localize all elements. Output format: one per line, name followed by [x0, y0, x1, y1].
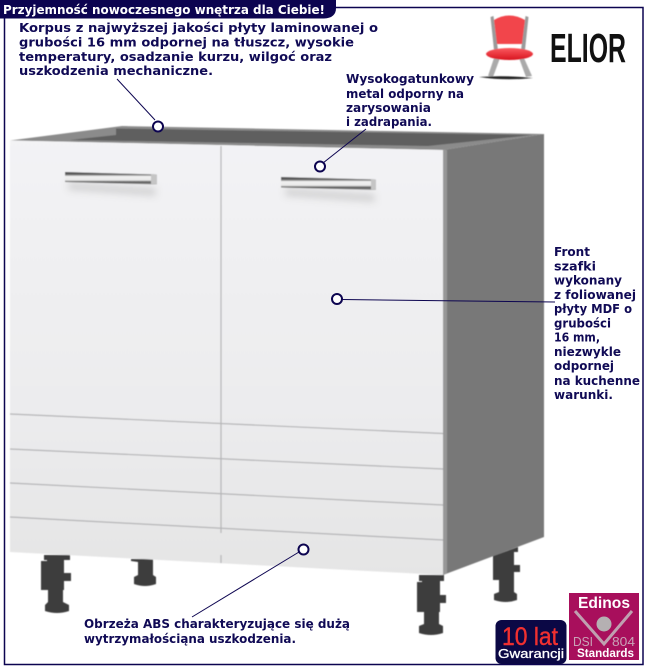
text: korpus: uszkodzenia mechaniczne. — [19, 64, 213, 78]
cabinet inner — [70, 128, 532, 146]
text: korpus — [19, 21, 378, 78]
leg: front left — [41, 555, 71, 613]
badge: 10 lat gwarancji: 10 lat — [502, 623, 558, 651]
icon: chair — [479, 16, 533, 79]
badge V mark — [575, 611, 632, 644]
text: front: na kuchenne — [554, 374, 640, 388]
callout: metal — [315, 129, 366, 172]
text: front: Front — [554, 245, 590, 259]
text: front: szafki — [554, 260, 596, 274]
badge: Edinos standards: 804 — [612, 634, 635, 649]
leg: front right — [417, 575, 446, 635]
handle: right — [281, 177, 376, 202]
badge: Edinos standards — [569, 593, 639, 660]
title bar: Przyjemność nowoczesnego wnętrza dla Ciebie! — [3, 3, 325, 17]
text: korpus: temperatury, osadzanie kurzu, wilgoć oraz — [19, 50, 332, 64]
text: front: wykonany — [554, 274, 622, 288]
callout: korpus — [117, 79, 163, 132]
text: front: odpornej — [554, 359, 614, 373]
text: front: warunki. — [554, 388, 613, 402]
logo: Elior — [479, 16, 626, 79]
text: front: 16 mm, — [554, 330, 600, 344]
text: obrzeża: Obrzeża ABS charakteryzujące się dużą — [84, 617, 350, 631]
badge: Edinos standards: DSI — [573, 634, 593, 649]
door gaps — [10, 146, 443, 563]
cabinet side — [443, 134, 544, 575]
badge: 10 lat gwarancji: Gwarancji — [498, 646, 564, 661]
handle: left — [65, 172, 157, 196]
callout: front — [332, 294, 555, 304]
cabinet illustration — [10, 126, 544, 635]
cabinet top — [10, 126, 544, 150]
text: front: z foliowanej — [554, 288, 636, 302]
leg: back left — [131, 559, 156, 586]
badge: Edinos standards: Standards — [577, 648, 634, 660]
text: front: płyty MDF o — [554, 302, 632, 316]
text: obrzeża: wytrzymałościąna uszkodzenia. — [84, 632, 296, 646]
text: metal: i zadrapania. — [346, 115, 432, 129]
text: metal: metal odporny na — [346, 87, 464, 101]
cabinet front — [10, 140, 443, 575]
text: metal — [346, 72, 474, 129]
cabinet legs — [41, 547, 520, 635]
text: korpus: Korpus z najwyższej jakości płyty laminowanej o — [19, 21, 378, 35]
text: korpus: grubości 16 mm odpornej na tłuszcz, wysokie — [19, 36, 354, 50]
text: metal: Wysokogatunkowy — [346, 72, 474, 86]
callout: obrzeża — [192, 544, 308, 617]
badge: Edinos standards: Edinos — [578, 595, 630, 612]
text: front — [554, 245, 640, 402]
leg: back right — [493, 547, 520, 602]
text: obrzeża — [84, 617, 350, 646]
text: metal: zarysowania — [346, 101, 431, 115]
text: front: grubości — [554, 316, 611, 330]
badge: 10 lat gwarancji — [496, 620, 566, 664]
text: front: niezwykle — [554, 345, 621, 359]
